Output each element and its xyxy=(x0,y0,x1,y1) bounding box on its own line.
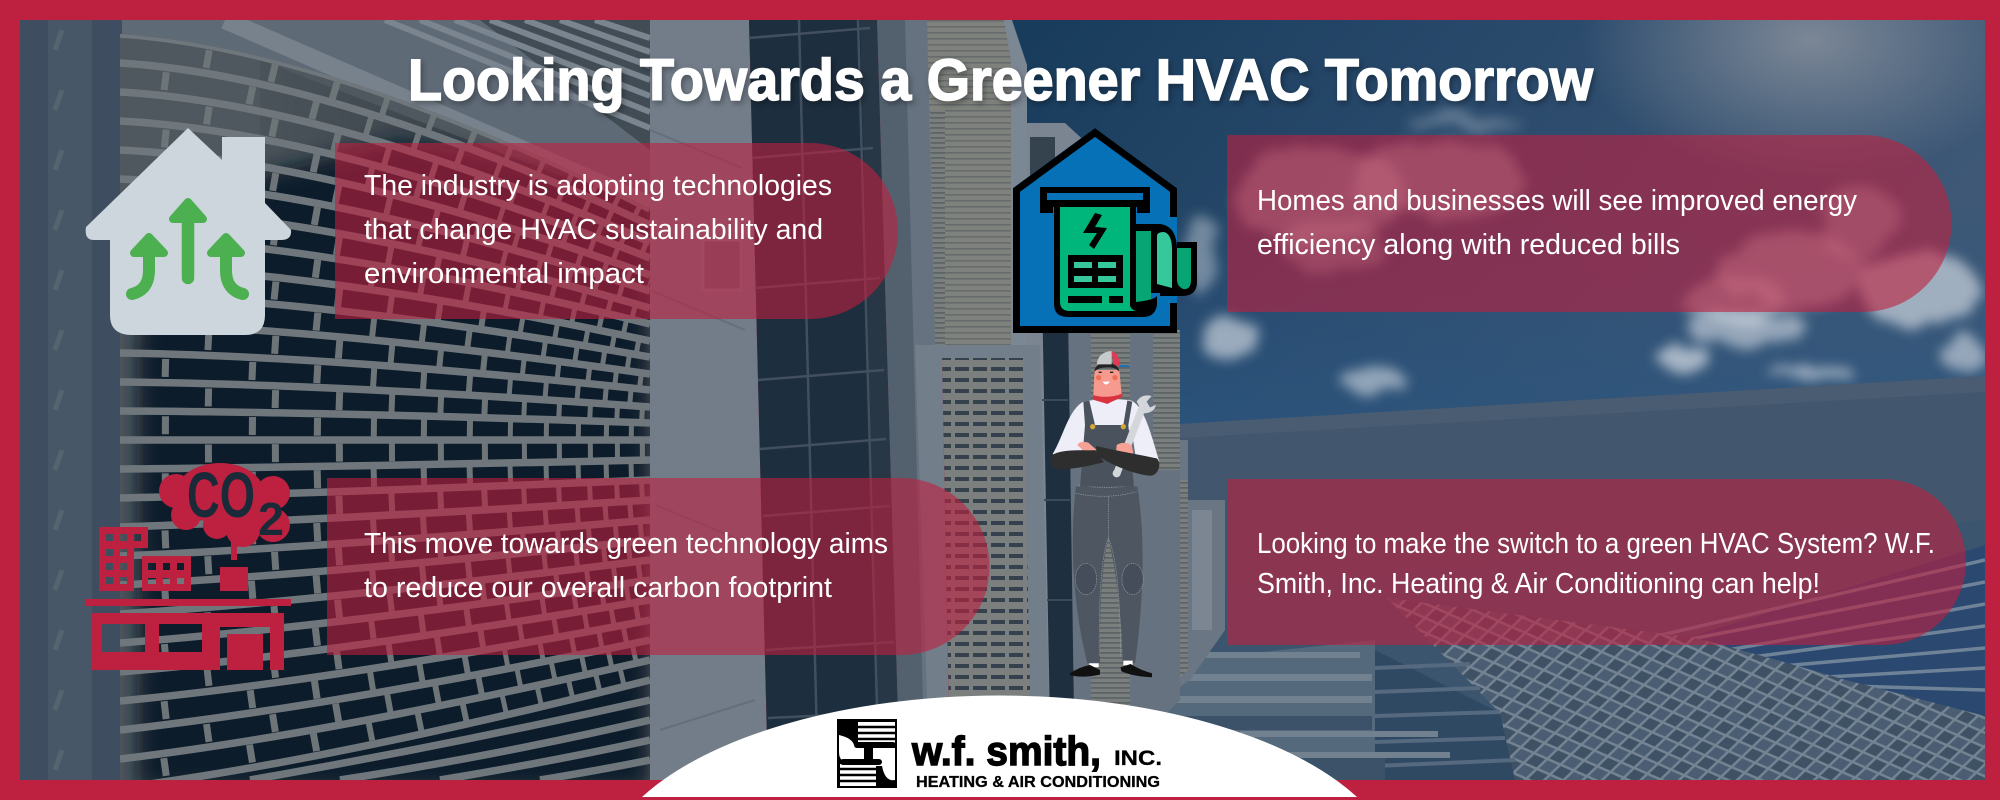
icon: CO2 and factory xyxy=(85,459,291,670)
lightning bolt xyxy=(1083,213,1107,249)
green arrows xyxy=(132,202,243,294)
logo tagline: HEATING & AIR CONDITIONING xyxy=(916,774,1160,791)
panel: industry adopting technologies xyxy=(335,143,898,319)
building panel xyxy=(1000,20,1090,780)
logo mark xyxy=(837,719,897,788)
scarf xyxy=(1093,393,1123,404)
crossed arms xyxy=(1051,450,1104,469)
CO2 label: CO xyxy=(187,459,255,531)
clouds xyxy=(1180,114,1985,396)
text: industry: that change HVAC sustainability and xyxy=(364,214,823,246)
bill printer slot xyxy=(1040,187,1150,213)
tall building xyxy=(99,527,148,591)
trousers xyxy=(1073,487,1143,663)
paper roll xyxy=(1134,224,1177,312)
text: carbon: This move towards green technology aims xyxy=(364,528,888,560)
logo badge xyxy=(642,696,1357,797)
lit panels beside louvers xyxy=(1004,20,1027,65)
panel: call to action xyxy=(1227,479,1966,645)
building window xyxy=(1030,137,1055,176)
mullions xyxy=(202,50,650,742)
roof surface xyxy=(1205,530,1985,780)
knee patches xyxy=(1075,563,1097,595)
sky xyxy=(1000,20,1985,440)
left blue column xyxy=(20,20,122,780)
dark narrow column xyxy=(1042,333,1074,699)
logo name: w.f. smith, xyxy=(911,728,1101,774)
icon: CO2 and factory: 2 xyxy=(258,493,284,545)
louver rails xyxy=(120,34,650,788)
text: efficiency: Homes and businesses will see improved energy xyxy=(1257,185,1857,217)
stitching xyxy=(1076,470,1137,657)
receipt xyxy=(1054,200,1157,317)
neck and face xyxy=(1093,370,1122,398)
upper fine louvers xyxy=(927,20,1011,345)
illustration: HVAC technician with wrench xyxy=(1051,351,1159,677)
far outdoor units xyxy=(1130,440,1225,720)
metal grating walkway xyxy=(1387,598,1985,780)
fan grille xyxy=(120,20,655,790)
dark service column xyxy=(749,20,900,780)
steel post xyxy=(877,20,923,702)
lower grille louvers xyxy=(942,358,1030,697)
text: efficiency: efficiency along with reduced bills xyxy=(1257,229,1680,261)
small building xyxy=(142,556,191,591)
panel: energy efficiency xyxy=(1227,135,1952,312)
shirt xyxy=(1053,399,1159,463)
left light panel xyxy=(20,20,660,780)
light top band xyxy=(225,20,650,205)
bib and straps xyxy=(1080,401,1134,487)
logo INC: INC. xyxy=(1114,747,1162,770)
hair and cap xyxy=(1094,363,1119,372)
text: call to action: Smith, Inc. Heating & Air Conditioning can help! xyxy=(1257,568,1820,600)
ground line xyxy=(85,599,291,606)
text: industry: environmental impact xyxy=(364,258,644,290)
chimney block xyxy=(220,567,248,591)
factory xyxy=(92,613,284,670)
upper louvers xyxy=(480,20,650,150)
text: call to action: Looking to make the switch to a green HVAC System? W.F. xyxy=(1257,528,1935,560)
house outline xyxy=(1016,132,1174,330)
bill table xyxy=(1068,255,1123,288)
sun glare xyxy=(1604,20,1985,148)
icon: energy bill xyxy=(1013,128,1197,333)
roof channels on the right xyxy=(1722,545,1985,716)
factory door xyxy=(227,634,263,670)
icon: house with green arrows xyxy=(86,128,291,335)
wrench xyxy=(1117,405,1143,474)
light cabinet strip xyxy=(650,20,768,780)
cabinet vent xyxy=(703,240,741,290)
CO2 cloud xyxy=(159,463,290,560)
panel: carbon footprint xyxy=(327,478,990,655)
second unit xyxy=(1068,333,1180,712)
corrugated wall xyxy=(1180,392,1985,586)
text: industry: The industry is adopting technologies xyxy=(364,170,832,202)
title: Looking Towards a Greener HVAC Tomorrow xyxy=(408,48,1594,113)
hands xyxy=(1077,442,1097,451)
text: carbon: to reduce our overall carbon footprint xyxy=(364,572,832,604)
socks and shoes xyxy=(1089,661,1133,667)
side sheet xyxy=(1160,242,1197,296)
roof steps xyxy=(1168,640,1375,752)
